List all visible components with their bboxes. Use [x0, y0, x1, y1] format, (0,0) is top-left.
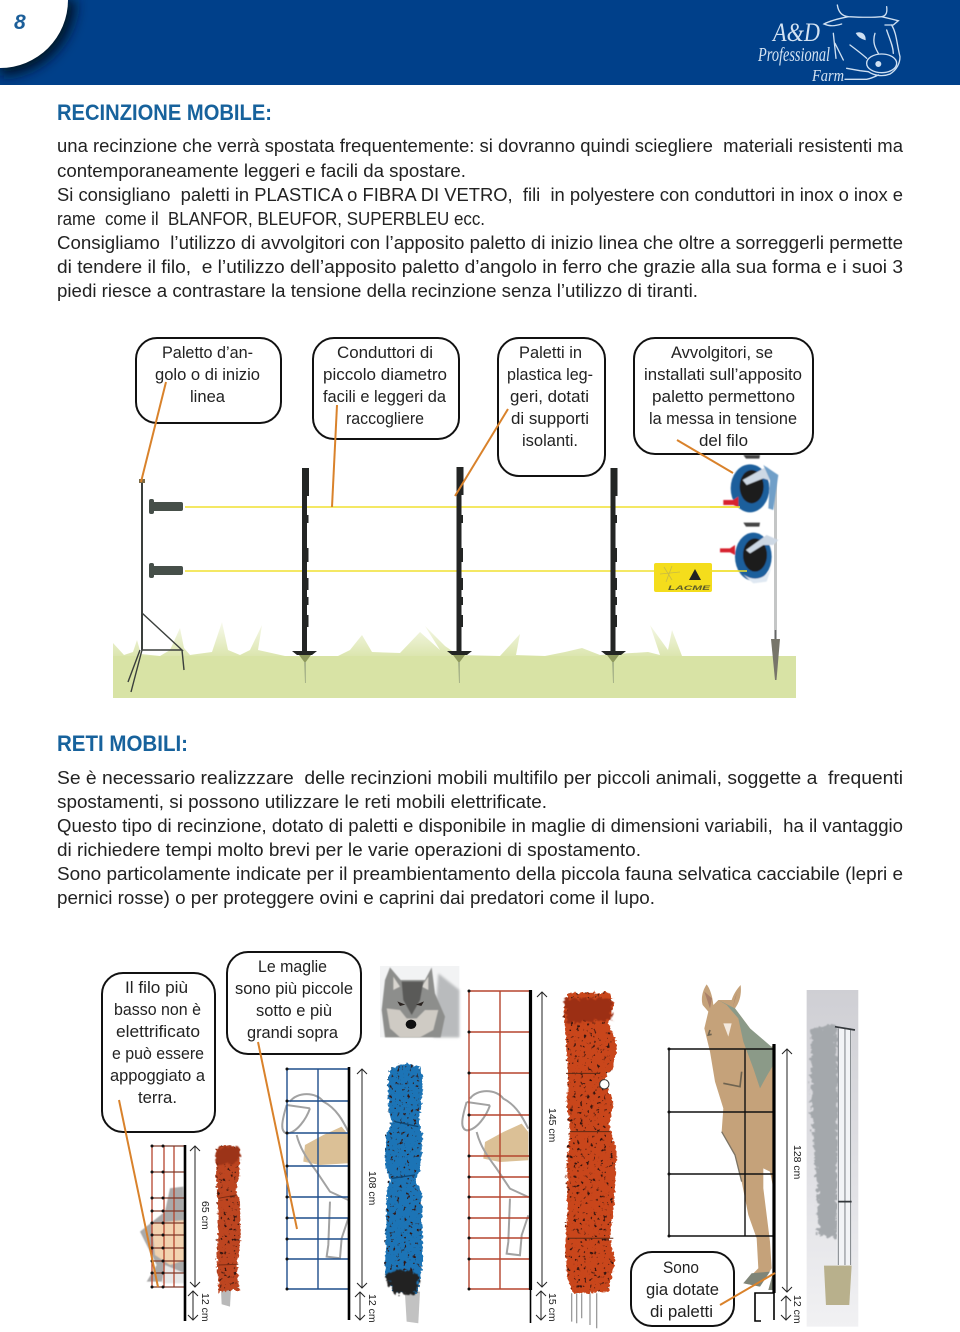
sheep: [462, 1091, 528, 1255]
callout: filo più basso: e può essere: [112, 1044, 204, 1063]
callout: paletti in plastica: geri, dotati: [510, 387, 589, 406]
yellow wires: [185, 507, 747, 571]
callout: le maglie: Le maglie: [258, 957, 327, 976]
text block: reti mobili: Se è necessario realizzzare delle recinzioni mobili multifilo per piccoli animali, soggette a frequenti: [57, 767, 903, 788]
net 108 cm with sheep: 12 cm: [366, 1294, 378, 1323]
text block: reti mobili: spostamenti, si possono utilizzare le reti mobili elettrificate.: [57, 791, 547, 812]
net 65 cm with rabbit: 65 cm: [199, 1201, 211, 1230]
sheep: [282, 1094, 348, 1258]
warning sign: [654, 563, 712, 592]
callout: sono già dotate: gia dotate: [646, 1280, 719, 1299]
net 145 cm with sheep: 145 cm: [546, 1108, 558, 1143]
callout: filo più basso: appoggiato a: [110, 1066, 206, 1085]
callout: conduttori: facili e leggeri da: [323, 387, 447, 406]
callout: paletti in plastica: isolanti.: [522, 431, 578, 450]
fence illustration: [113, 455, 796, 698]
wire end over reel: [710, 507, 747, 571]
text block: recinzione mobile: [57, 135, 904, 301]
warning sign: LACME: [668, 585, 711, 592]
callout: paletto d'angolo: [136, 338, 281, 482]
callout: sono già dotate: di paletti: [650, 1302, 713, 1321]
heading: reti mobili: RETI MOBILI:: [57, 731, 188, 756]
text block: recinzione mobile: di tendere il filo, e l’utilizzo dell’apposito paletto d’angolo in ferro che grazie alla sua forma e i suoi 3: [57, 256, 903, 277]
net roll red large: [564, 992, 617, 1328]
heading: recinzione mobile: RECINZIONE MOBILE:: [57, 100, 272, 125]
net 108 cm with sheep: [282, 1067, 378, 1323]
text block: recinzione mobile: contemporaneamente leggeri e facili da spostare.: [57, 160, 466, 181]
logo: A&D: [771, 18, 820, 47]
text block: reti mobili: di richiedere tempi molto brevi per le varie operazioni di spostamento.: [57, 839, 641, 860]
logo: Professional: [757, 44, 830, 66]
callout: paletti in plastica: di supporti: [511, 409, 589, 428]
callout: paletto d'angolo: golo o di inizio: [155, 365, 260, 384]
plastic post 3: [601, 468, 626, 683]
callout: avvolgitori: [634, 338, 813, 473]
callout: paletti in plastica: plastica leg-: [507, 365, 593, 384]
plastic post 2: [447, 467, 472, 683]
callout: filo più basso: terra.: [138, 1088, 177, 1107]
logo: [757, 5, 900, 85]
net 65 cm with rabbit: [140, 1145, 211, 1322]
reel bottom: [720, 523, 778, 583]
text block: recinzione mobile: una recinzione che verrà spostata frequentemente: si dovranno quindi sciegliere materiali resistenti ma: [57, 135, 904, 156]
logo: Farm: [811, 66, 844, 85]
page tab shadow: [0, 0, 76, 76]
net roll grey photo: [807, 990, 858, 1327]
horse: [702, 984, 773, 1290]
corner post: [128, 479, 184, 692]
page number: 8: [14, 11, 26, 34]
callout: conduttori: piccolo diametro: [323, 365, 447, 384]
net 128 cm with horse: 128 cm: [791, 1145, 803, 1180]
callout: sono già dotate: Sono: [663, 1258, 699, 1277]
ground: [113, 656, 796, 698]
text block: recinzione mobile: rame come il BLANFOR, BLEUFOR, SUPERBLEU ecc.: [57, 208, 485, 229]
net 145 cm with sheep: [462, 990, 558, 1323]
net 145 cm with sheep: 15 cm: [546, 1293, 558, 1322]
callout: avvolgitori: Avvolgitori, se: [671, 343, 773, 362]
text block: recinzione mobile: piedi riesce a contrastare la tensione della recinzione senza l’utilizzo di tiranti.: [57, 280, 698, 301]
callout: paletti in plastica: Paletti in: [519, 343, 582, 362]
callout: conduttori: [313, 338, 459, 507]
callout: avvolgitori: la messa in tensione: [649, 409, 797, 428]
callout: le maglie: sono più piccole: [235, 979, 353, 998]
net 128 cm with horse: [669, 984, 803, 1324]
net 128 cm with horse: 12 cm: [791, 1295, 803, 1324]
text block: recinzione mobile: Consigliamo l’utilizzo di avvolgitori con l’apposito paletto di inizio linea che oltre a sorreggerli permette: [57, 232, 903, 253]
callout: filo più basso: basso non è: [114, 1000, 201, 1019]
text block: reti mobili: Questo tipo di recinzione, dotato di paletti e disponibile in maglie di dimensioni variabili, ha il vantaggio: [57, 815, 903, 836]
net 108 cm with sheep: 108 cm: [366, 1171, 378, 1206]
callout: filo più basso: elettrificato: [116, 1022, 200, 1041]
callout: paletto d'angolo: linea: [190, 387, 226, 406]
callout: le maglie: grandi sopra: [247, 1023, 339, 1042]
callout: paletti in plastica: [455, 338, 605, 496]
callout: le maglie: [227, 952, 361, 1229]
callout: conduttori: Conduttori di: [337, 343, 433, 362]
callout: avvolgitori: paletto permettono: [652, 387, 795, 406]
callout: avvolgitori: del filo: [699, 431, 748, 450]
text block: reti mobili: Sono particolamente indicate per il preambientamento della piccola fauna selvatica cacciabile (lepri e: [57, 863, 903, 884]
plastic post 1: [292, 468, 317, 683]
callout: le maglie: sotto e più: [256, 1001, 332, 1020]
net 65 cm with rabbit: 12 cm: [199, 1293, 211, 1322]
text block: recinzione mobile: Si consigliano paletti in PLASTICA o FIBRA DI VETRO, fili in polyestere con conduttori in inox o inox e: [57, 184, 903, 205]
reel top: [723, 455, 778, 512]
callout: sono già dotate: [631, 1252, 775, 1326]
text block: reti mobili: [57, 767, 903, 908]
callout: filo più basso: Il filo più: [125, 978, 188, 997]
callout: paletto d'angolo: Paletto d’an-: [162, 343, 253, 362]
reel post: [771, 476, 780, 680]
net roll red small: [216, 1146, 241, 1307]
callout: filo più basso: [102, 973, 215, 1287]
callout: avvolgitori: installati sull’apposito: [644, 365, 802, 384]
cow head: [824, 5, 900, 79]
net roll blue: [385, 1064, 423, 1323]
header band: [0, 0, 960, 85]
rabbit: [140, 1187, 185, 1283]
page tab: [0, 0, 68, 68]
wolf photo: [380, 966, 459, 1037]
text block: reti mobili: pernici rosse) o per proteggere ovini e caprini dai predatori come il lupo.: [57, 887, 655, 908]
grass tufts: [113, 622, 796, 660]
callout: conduttori: raccogliere: [346, 409, 424, 428]
